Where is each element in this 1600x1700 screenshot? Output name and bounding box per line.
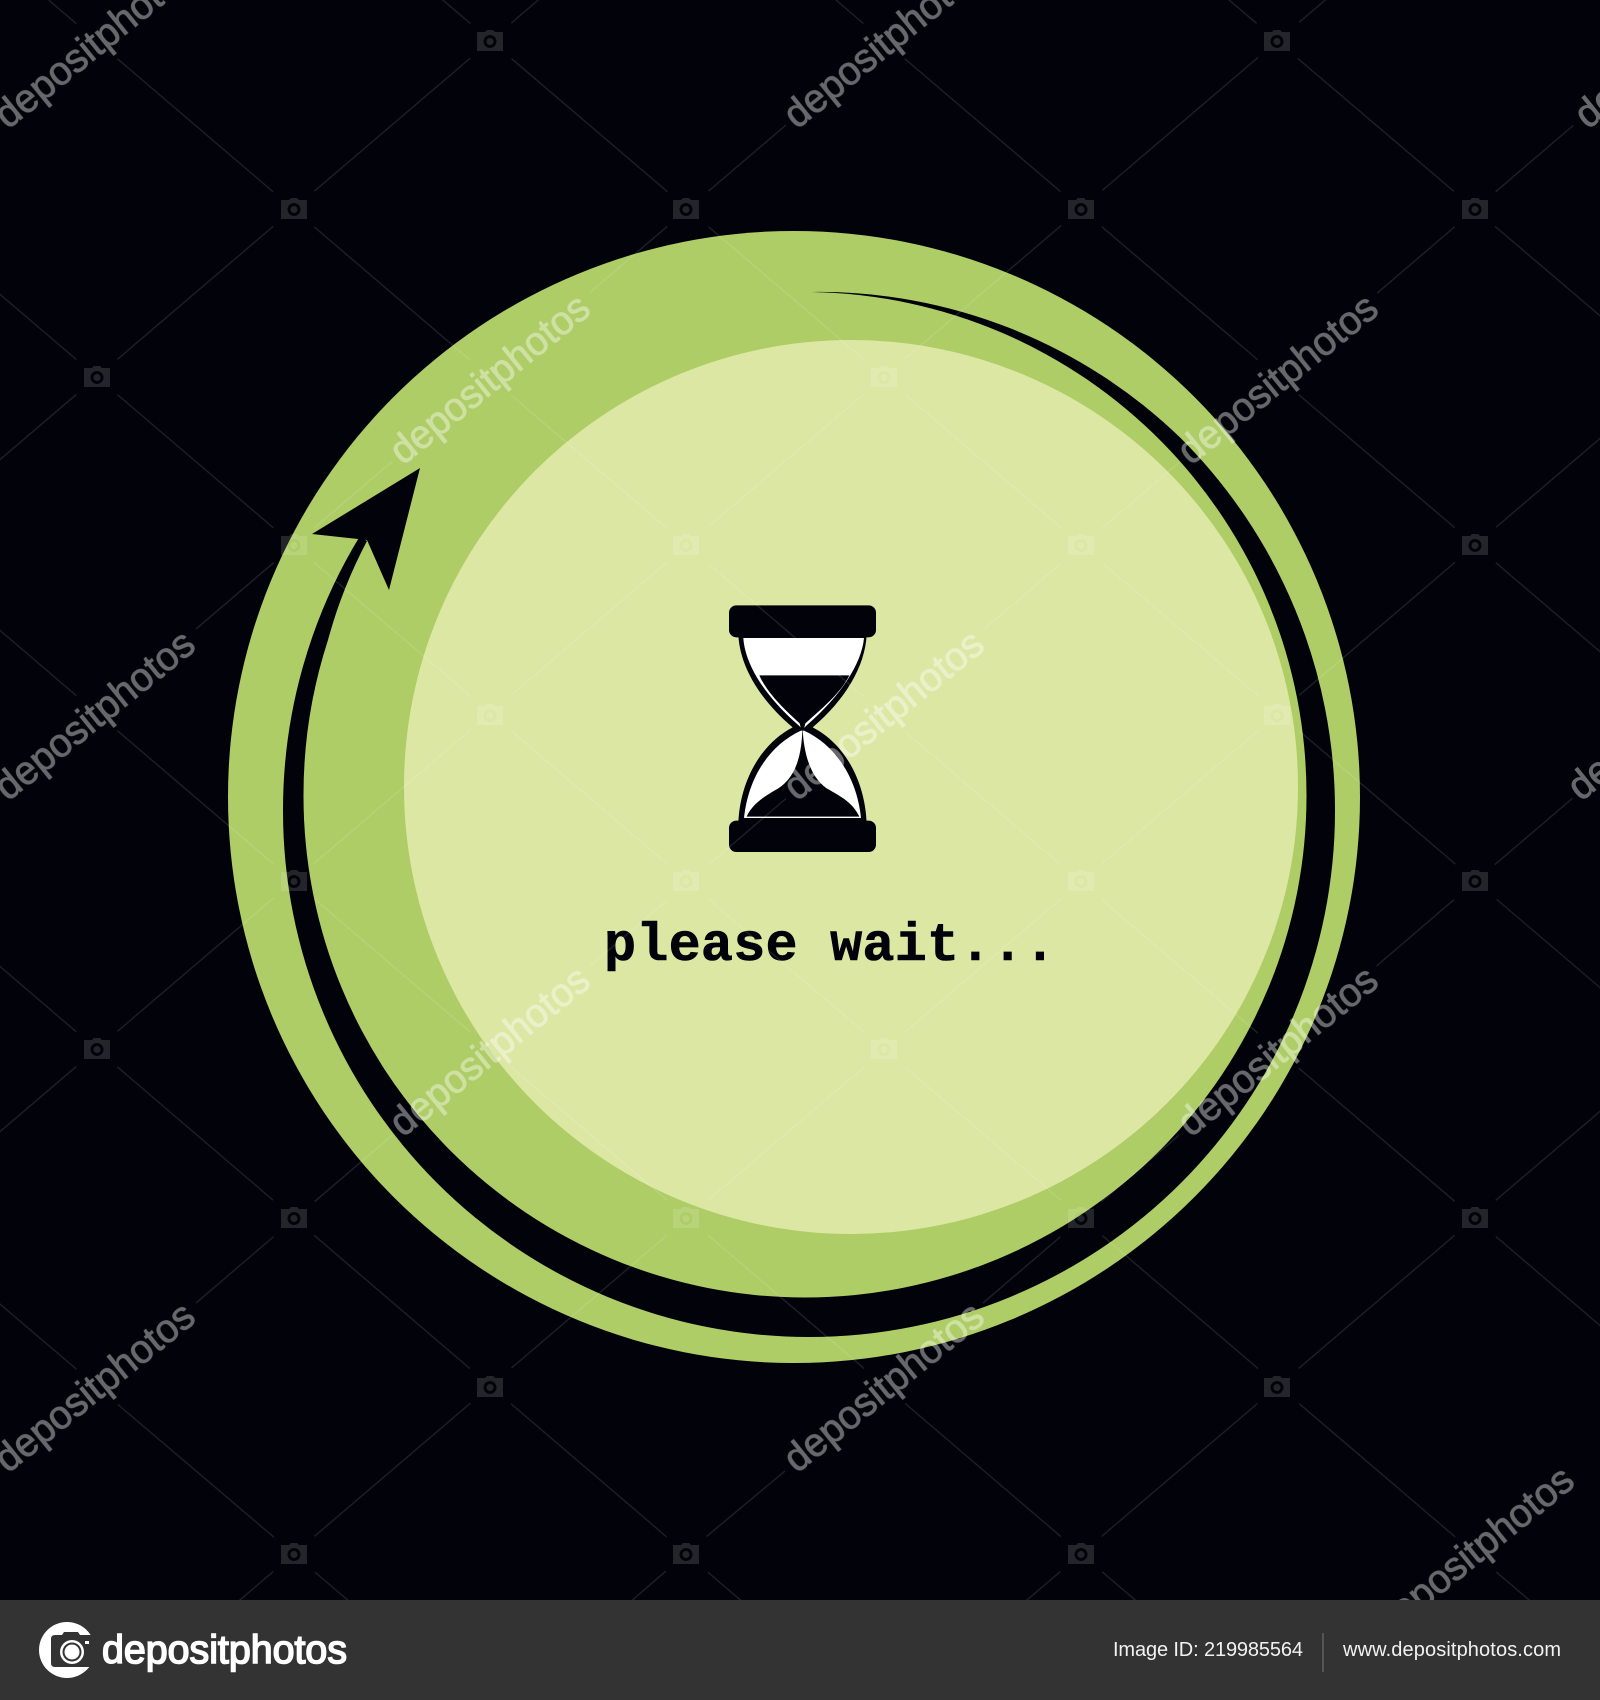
diagonal depositphotos watermarks: depositphotos — [1169, 957, 1386, 1145]
image id: Image ID: 219985564 — [1113, 1639, 1303, 1661]
diagonal depositphotos watermarks: depositphotos — [381, 285, 598, 473]
diagonal depositphotos watermarks: depositphotos — [775, 621, 992, 809]
diagonal depositphotos watermarks: depositphotos — [381, 957, 598, 1145]
inner light green disc — [404, 340, 1298, 1234]
icon: depositphotos logo — [39, 1622, 96, 1678]
camera watermark icons — [84, 30, 1488, 1564]
diagonal depositphotos watermarks: depositphotos — [775, 1293, 992, 1481]
text: please wait: please wait... — [604, 916, 1056, 977]
circular black arrow — [283, 292, 1335, 1337]
arrow shaft — [283, 292, 1335, 1337]
diagonal depositphotos watermarks: depositphotos — [1365, 1457, 1582, 1645]
footer bar — [0, 1600, 1600, 1700]
website url: www.depositphotos.com — [1342, 1639, 1561, 1661]
logo wordmark: depositphotos — [102, 1628, 347, 1672]
icon: hourglass — [729, 605, 876, 852]
divider — [1322, 1633, 1324, 1672]
diagonal depositphotos watermarks: depositphotos — [1169, 285, 1386, 473]
arrowhead — [312, 468, 420, 590]
outer green circle — [228, 231, 1360, 1363]
